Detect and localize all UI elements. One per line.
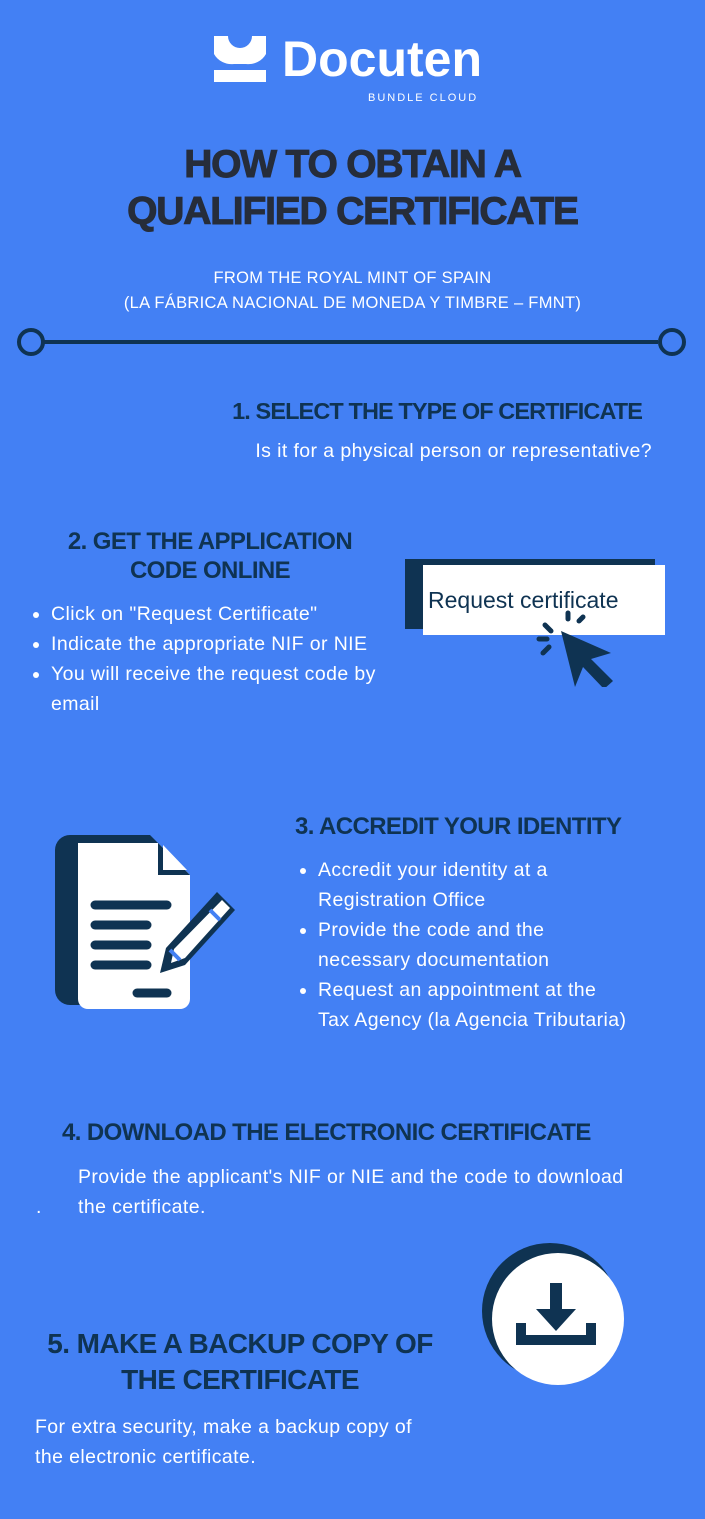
- step 2 heading: [68, 528, 352, 584]
- step 4 heading: 4. DOWNLOAD THE ELECTRONIC CERTIFICATE: [62, 1119, 591, 1146]
- subtitle: (LA FÁBRICA NACIONAL DE MONEDA Y TIMBRE – FMNT): [124, 294, 581, 312]
- step 3 list: [300, 859, 626, 1031]
- step 3 list: Registration Office: [318, 889, 486, 911]
- step 3 list: Tax Agency (la Agencia Tributaria): [318, 1009, 626, 1031]
- step 5 heading: THE CERTIFICATE: [121, 1364, 359, 1395]
- request certificate button illustration: Request certificate: [428, 587, 618, 613]
- icon: cursor: [536, 610, 613, 687]
- step 3: [295, 813, 626, 1031]
- subtitle: FROM THE ROYAL MINT OF SPAIN: [214, 269, 491, 287]
- step 2 list: Indicate the appropriate NIF or NIE: [51, 633, 367, 655]
- step 2: [33, 528, 376, 715]
- title: HOW TO OBTAIN A: [184, 143, 521, 186]
- step 5 text: For extra security, make a backup copy of the electronic certificate.: [35, 1416, 412, 1468]
- icon: download circle: [482, 1243, 624, 1385]
- step 3 list: Request an appointment at the: [318, 979, 596, 1001]
- step 5 heading: 5. MAKE A BACKUP COPY OF: [47, 1328, 433, 1359]
- title: QUALIFIED CERTIFICATE: [127, 190, 578, 233]
- step 3 heading: 3. ACCREDIT YOUR IDENTITY: [295, 813, 621, 840]
- step 1 text: Is it for a physical person or representative?: [255, 440, 652, 462]
- step 2 heading: CODE ONLINE: [130, 557, 290, 584]
- step 4: [36, 1119, 623, 1218]
- logo: BUNDLE CLOUD: [368, 92, 478, 104]
- step 2 heading: 2. GET THE APPLICATION: [68, 528, 352, 555]
- step 4 text: Provide the applicant's NIF or NIE and the code to download the certificate.: [78, 1166, 623, 1218]
- logo mark: [214, 36, 266, 82]
- step 3 list: Accredit your identity at a: [318, 859, 548, 881]
- step 3 list: Provide the code and the: [318, 919, 544, 941]
- step 5 heading: [47, 1328, 433, 1395]
- step 5: [35, 1328, 433, 1468]
- icon: document with pencil: [55, 835, 235, 1009]
- step 3 list: necessary documentation: [318, 949, 549, 971]
- logo: [214, 31, 482, 104]
- step 2 list: Click on "Request Certificate": [51, 603, 317, 625]
- step 2 list: [33, 603, 376, 715]
- step 1: [232, 398, 652, 462]
- title: [127, 143, 578, 233]
- subtitle: [124, 269, 581, 312]
- request certificate button illustration: [405, 559, 665, 687]
- divider line with circles: [17, 328, 686, 356]
- step 2 list: You will receive the request code by email: [51, 663, 376, 715]
- step 4: .: [36, 1196, 42, 1218]
- step 1 heading: 1. SELECT THE TYPE OF CERTIFICATE: [232, 398, 642, 424]
- logo text: Docuten: [282, 31, 482, 87]
